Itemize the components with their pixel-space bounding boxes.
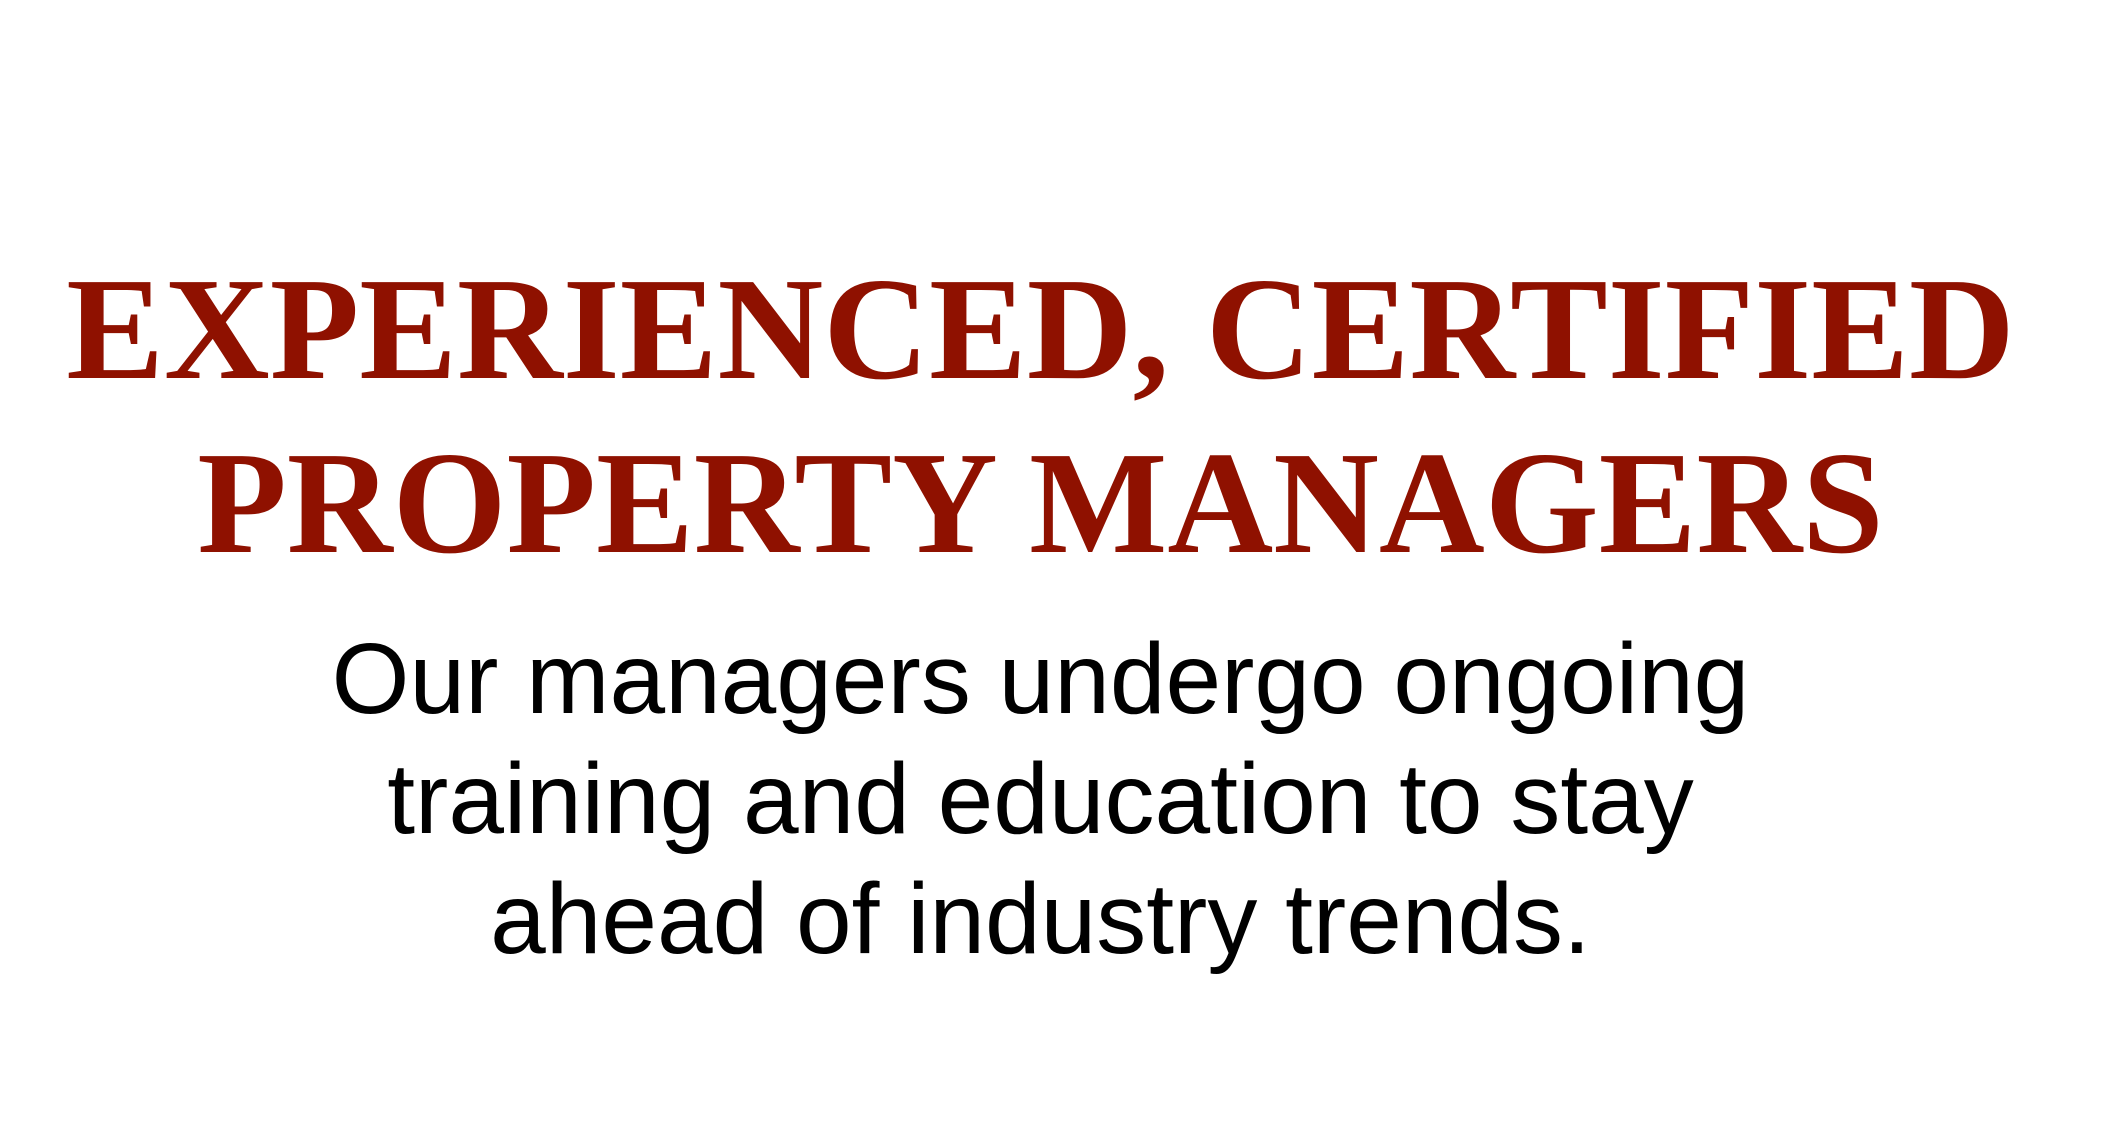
body text: ahead of industry trends.: [490, 863, 1591, 975]
title: EXPERIENCED, CERTIFIED: [66, 246, 2015, 410]
body text: [332, 623, 1749, 975]
body text: Our managers undergo ongoing: [332, 623, 1749, 735]
title: [66, 246, 2015, 584]
title: PROPERTY MANAGERS: [197, 420, 1884, 584]
body text: training and education to stay: [387, 743, 1694, 855]
